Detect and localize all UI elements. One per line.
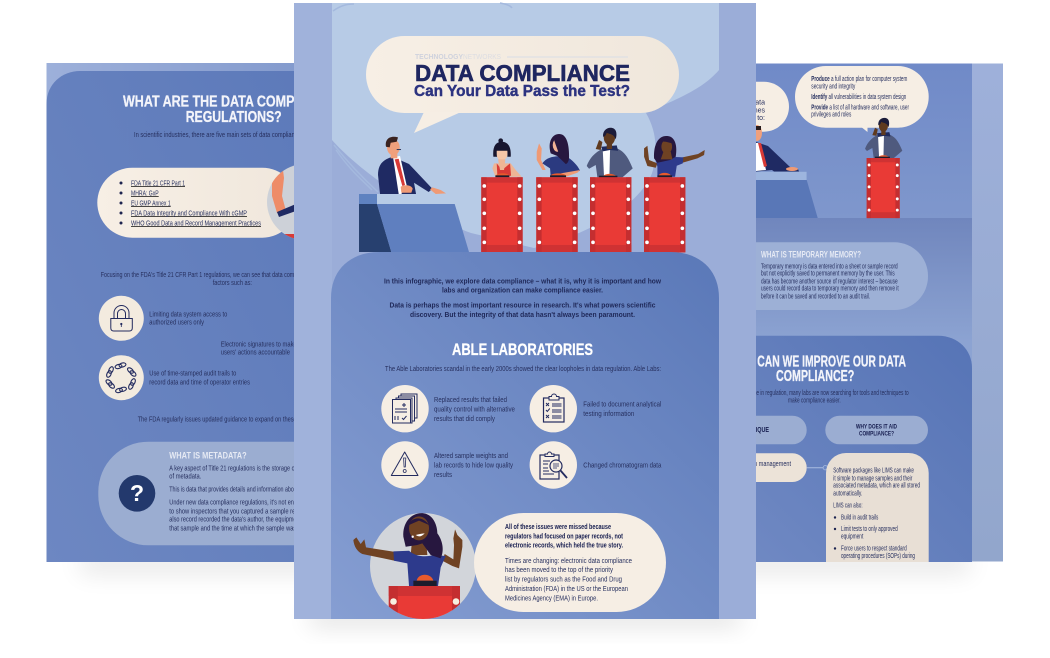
- card: lims explanation: Force users to respect standard: [841, 545, 907, 552]
- illustration: host: [378, 137, 446, 194]
- card: lims explanation: operating procedures (SOPs) during: [841, 553, 915, 560]
- illustration: contestant two: [537, 134, 580, 177]
- text: fda guidance: The FDA regularly issues updated guidance to expand on these: [138, 416, 297, 423]
- text: metadata body: to show inspectors that you captured a sample result: [169, 508, 304, 515]
- soft page shadows: [80, 552, 970, 626]
- speech bubble: contestant: privileges and roles: [811, 112, 852, 119]
- panel: what is temporary memory: users could record data to temporary memory and then remove it: [761, 286, 899, 293]
- brand line: NETWORKS: [463, 52, 501, 61]
- panel: what is metadata: [98, 442, 358, 545]
- icon: question mark: [119, 475, 155, 512]
- regulations list bubble: EU GMP Annex 1: [131, 200, 171, 207]
- panel: what is temporary memory: WHAT IS TEMPORARY MEMORY?: [761, 249, 861, 259]
- illustration: contestant four: [644, 136, 705, 177]
- icon: warning triangle: [381, 441, 429, 489]
- title speech bubble: [366, 36, 679, 133]
- illustration: host and desk: [752, 125, 818, 218]
- illustration: woman at podium: [353, 513, 476, 626]
- icon: padlock: [99, 296, 144, 341]
- heading: improve compliance: [758, 355, 906, 382]
- panel: what is temporary memory: data has become another source of regulator interest – because: [761, 278, 898, 285]
- text: electronic signatures: Electronic signatures to make: [221, 342, 297, 349]
- brand line: [415, 52, 628, 61]
- text: metadata body: Under new data compliance regulations, it's not enough: [169, 500, 306, 507]
- card: lims explanation: associated metadata, which are all stored: [833, 483, 920, 490]
- speech bubble: host: nes: [754, 107, 765, 114]
- card: lims explanation: equipment: [841, 534, 863, 541]
- text: metadata body: This is data that provides details and information about: [169, 487, 298, 494]
- text: electronic signatures: [221, 342, 297, 357]
- item: altered sample weights: Altered sample weights and: [434, 453, 508, 460]
- callout: all of these issues: list by regulators such as the Food and Drug: [505, 577, 622, 584]
- item: altered sample weights: [381, 441, 513, 489]
- technique pill: Laboratory information management: [702, 461, 791, 468]
- heading: regulations: [123, 94, 341, 126]
- text: intro paragraph one: [384, 278, 662, 294]
- speech bubble: host: y to:: [752, 115, 765, 122]
- text: audit trails: Use of time-stamped audit trails to: [149, 371, 236, 378]
- text: intro paragraph one: labs and organization can make compliance easier.: [442, 288, 603, 294]
- illustration: presenter circle: [267, 166, 294, 238]
- text: intro to regulations: In scientific industries, there are five main sets of data compliance regulations:: [134, 132, 332, 139]
- text: improve intro: With this change in regulation, many labs are now searching for tools and techniques to: [724, 390, 909, 397]
- item: replaced results: results that did comply: [434, 416, 495, 423]
- item: changed chromatogram: Changed chromatogram data: [583, 463, 661, 470]
- text: audit trails: [149, 371, 250, 386]
- technique pill: [756, 453, 807, 482]
- icon: audit trail links: [99, 355, 144, 400]
- card: lims explanation: LIMS can also:: [833, 502, 863, 509]
- callout: all of these issues: has been moved to the top of the priority: [505, 567, 613, 574]
- illustration: contestant at podium: [865, 118, 902, 218]
- illustration: red podiums: [481, 177, 685, 252]
- speech bubble: host: data: [751, 100, 765, 107]
- icon: clipboard and magnifier: [530, 441, 577, 489]
- item: altered sample weights: results: [434, 472, 452, 479]
- text: metadata body: [169, 466, 306, 533]
- text: metadata body: A key aspect of Title 21 regulations is the storage of: [169, 466, 296, 473]
- text: able labs intro: The Able Laboratories scandal in the early 2000s showed the clear loopholes in data regulation. Able Labs:: [385, 366, 661, 373]
- panel: what is temporary memory: Temporary memory is data entered into a sheet or sample record: [761, 263, 898, 270]
- icon: question mark: ?: [130, 480, 144, 506]
- speech bubble: contestant: security and integrity: [811, 83, 856, 90]
- speech bubble: contestant: Identify all vulnerabilities in data system design: [811, 94, 906, 101]
- column header: why does it aid compliance: WHY DOES IT AID: [856, 424, 897, 431]
- text: focusing on title 21: [101, 272, 326, 287]
- text: audit trails: record data and time of operator entries: [149, 379, 250, 386]
- item: altered sample weights: lab records to hide low quality: [434, 463, 513, 470]
- connector: [807, 466, 828, 470]
- text: focusing on title 21: factors such as:: [213, 280, 252, 287]
- column header: why does it aid compliance: COMPLIANCE?: [859, 430, 894, 438]
- heading: metadata: WHAT IS METADATA?: [169, 450, 247, 460]
- item: replaced results: [381, 385, 515, 432]
- illustration: contestant three: [587, 128, 633, 178]
- subtitle: Can Your Data Pass the Test?: [414, 83, 630, 100]
- column header: technique: [756, 416, 807, 444]
- illustration: host desk: [359, 194, 469, 252]
- speech bubble: contestant: Produce a full action plan for computer system: [811, 76, 907, 83]
- text: limiting access: Limiting data system access to: [149, 312, 227, 319]
- speech bubble: host: [756, 82, 789, 132]
- regulations list bubble: [97, 168, 297, 238]
- text: intro paragraph two: Data is perhaps the most important resource in research. It's what powers scientific: [390, 303, 656, 310]
- illustration: game show scene: [359, 128, 705, 252]
- text: focusing on title 21: Focusing on the FDA's Title 21 CFR Part 1 regulations, we can see that data compliance relies: [101, 272, 326, 279]
- text: intro paragraph two: discovery. But the integrity of that data hasn't always been paramount.: [410, 312, 635, 319]
- callout: all of these issues: All of these issues were missed because: [505, 524, 611, 531]
- text: metadata body: that sample and the time at which the sample was: [169, 526, 297, 533]
- title: DATA COMPLIANCE: [415, 60, 630, 86]
- panel: main content: [331, 252, 719, 626]
- item: changed chromatogram: [530, 441, 661, 489]
- item: failed to document: Failed to document analytical: [583, 402, 662, 409]
- card: lims explanation: automatically.: [833, 491, 862, 498]
- callout: all of these issues: Times are changing: electronic data compliance: [505, 558, 632, 565]
- text: metadata body: of metadata.: [169, 474, 201, 481]
- heading: regulations: REGULATIONS?: [186, 109, 282, 126]
- callout: all of these issues: Medicines Agency (EMA) in Europe.: [505, 596, 598, 603]
- panel: left page, what are the data compliance regulations: [46, 63, 294, 562]
- regulations list bubble: WHO Good Data and Record Management Practices: [131, 220, 261, 227]
- icon: clipboard checklist: [530, 385, 577, 432]
- text: electronic signatures: users' actions accountable: [221, 350, 290, 357]
- hero background: [332, 3, 719, 248]
- heading: improve compliance: COMPLIANCE?: [776, 368, 854, 385]
- decorative brush strokes: [333, 3, 512, 192]
- panel: what is temporary memory: [756, 242, 928, 310]
- illustration: contestant one: [492, 138, 522, 177]
- text: metadata body: also record recorded the data's author, the equipment: [169, 517, 301, 524]
- card: lims explanation: Build in audit trails: [841, 514, 879, 521]
- card: lims explanation: Limit tests to only approved: [841, 526, 898, 533]
- heading: improve compliance: HOW CAN WE IMPROVE OUR DATA: [729, 354, 906, 371]
- heading: able laboratories: ABLE LABORATORIES: [452, 341, 593, 359]
- brand line: TECHNOLOGY: [415, 52, 463, 61]
- column header: technique: TECHNIQUE: [737, 427, 769, 434]
- text: limiting access: [149, 312, 227, 326]
- panel: what is temporary memory: before it can be saved and recorded to an audit trail.: [761, 293, 870, 300]
- callout: all of these issues: electronic records, which held the true story.: [505, 543, 623, 550]
- panel: right page, how can we improve: [756, 64, 1003, 562]
- icon: document stack: [381, 385, 429, 432]
- callout: all of these issues: [474, 513, 666, 612]
- panel: main page: [294, 3, 756, 626]
- text: limiting access: authorized users only: [149, 319, 204, 326]
- card: lims explanation: it simple to manage samples and their: [833, 475, 913, 482]
- text: improve intro: [756, 390, 908, 404]
- regulations list bubble: MHRA: GxP: [131, 190, 159, 197]
- heading: regulations: WHAT ARE THE DATA COMPLIANCE: [123, 94, 341, 111]
- column header: why does it aid compliance: [825, 416, 928, 444]
- item: replaced results: Replaced results that failed: [434, 397, 507, 404]
- text: intro paragraph one: In this infographic, we explore data compliance – what it is, why it is important and how: [384, 278, 662, 286]
- callout: all of these issues: regulators had focused on paper records, not: [505, 534, 624, 541]
- text: improve intro: make compliance easier.: [788, 398, 841, 405]
- item: failed to document: [530, 385, 662, 432]
- card: lims explanation: [826, 453, 929, 562]
- panel: what is temporary memory: but not explicitly saved to permanent memory by the user. This: [761, 271, 895, 278]
- item: replaced results: quality control with alternative: [434, 406, 515, 414]
- speech bubble: contestant: [795, 66, 929, 132]
- speech bubble: contestant: Provide a list of all hardware and software, user: [811, 104, 909, 111]
- item: failed to document: testing information: [583, 411, 634, 418]
- text: intro paragraph two: [390, 303, 656, 319]
- regulations list bubble: FDA Title 21 CFR Part 1: [131, 180, 185, 187]
- card: lims explanation: Software packages like LIMS can make: [833, 468, 914, 475]
- regulations list bubble: FDA Data Integrity and Compliance With cGMP: [131, 210, 247, 217]
- callout: all of these issues: Administration (FDA) in the US or the European: [505, 586, 628, 593]
